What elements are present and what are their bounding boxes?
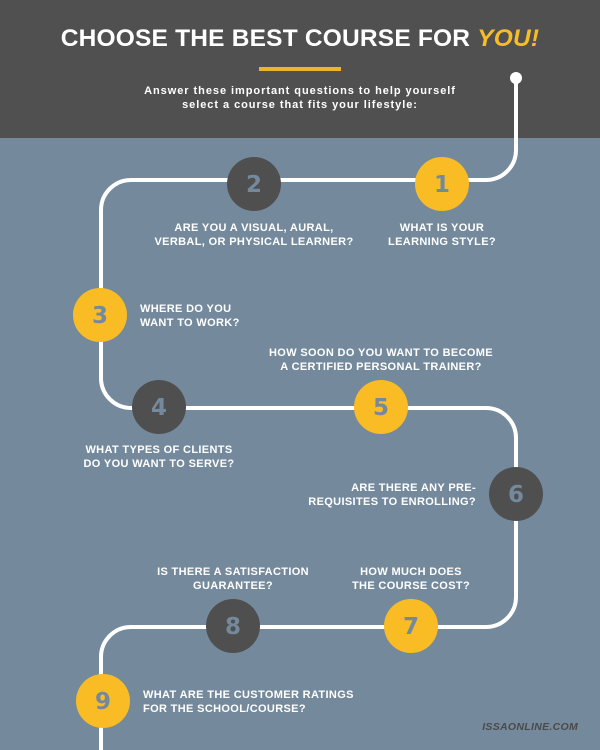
subtitle <box>144 85 456 111</box>
text 8: GUARANTEE? <box>193 580 273 592</box>
text 9: WHAT ARE THE CUSTOMER RATINGS <box>143 689 354 701</box>
text 3: WHERE DO YOU <box>140 303 231 315</box>
text 4: DO YOU WANT TO SERVE? <box>84 458 234 470</box>
footer brand: ISSAONLINE.COM <box>482 721 578 733</box>
text 2: VERBAL, OR PHYSICAL LEARNER? <box>154 236 354 248</box>
header band <box>0 0 600 138</box>
text 6 <box>308 482 476 508</box>
text 4: WHAT TYPES OF CLIENTS <box>85 444 233 456</box>
text 6: REQUISITES TO ENROLLING? <box>308 496 476 508</box>
step 3: 3 <box>92 303 108 329</box>
step 6 <box>489 467 543 521</box>
text 9 <box>143 689 354 715</box>
step 5: 5 <box>373 395 389 421</box>
step 4 <box>132 380 186 434</box>
step 4: 4 <box>151 395 167 421</box>
text 4 <box>84 444 234 470</box>
step 7 <box>384 599 438 653</box>
subtitle: select a course that fits your lifestyle: <box>182 99 418 111</box>
text 3: WANT TO WORK? <box>140 317 240 329</box>
text 5: A CERTIFIED PERSONAL TRAINER? <box>280 361 482 373</box>
step 8: 8 <box>225 614 241 640</box>
text 1: WHAT IS YOUR <box>400 222 484 234</box>
text 5 <box>269 347 493 373</box>
step 1 <box>415 157 469 211</box>
step 3 <box>73 288 127 342</box>
text 8 <box>157 566 309 592</box>
text 7: THE COURSE COST? <box>352 580 470 592</box>
text 2: ARE YOU A VISUAL, AURAL, <box>174 222 334 234</box>
text 8: IS THERE A SATISFACTION <box>157 566 309 578</box>
text 9: FOR THE SCHOOL/COURSE? <box>143 703 306 715</box>
text 1: LEARNING STYLE? <box>388 236 496 248</box>
subtitle: Answer these important questions to help yourself <box>144 85 456 97</box>
step 9: 9 <box>95 689 111 715</box>
text 7: HOW MUCH DOES <box>360 566 462 578</box>
step 5 <box>354 380 408 434</box>
text 2 <box>154 222 354 248</box>
text 7 <box>352 566 470 592</box>
text 1 <box>388 222 496 248</box>
step 8 <box>206 599 260 653</box>
title: CHOOSE THE BEST COURSE FOR YOU! <box>61 25 539 52</box>
text 3 <box>140 303 240 329</box>
step 7: 7 <box>403 614 419 640</box>
yellow underline <box>259 67 341 71</box>
step 1: 1 <box>434 172 450 198</box>
step 2 <box>227 157 281 211</box>
step 9 <box>76 674 130 728</box>
step 2: 2 <box>246 172 262 198</box>
text 5: HOW SOON DO YOU WANT TO BECOME <box>269 347 493 359</box>
text 6: ARE THERE ANY PRE- <box>351 482 476 494</box>
step 6: 6 <box>508 482 524 508</box>
